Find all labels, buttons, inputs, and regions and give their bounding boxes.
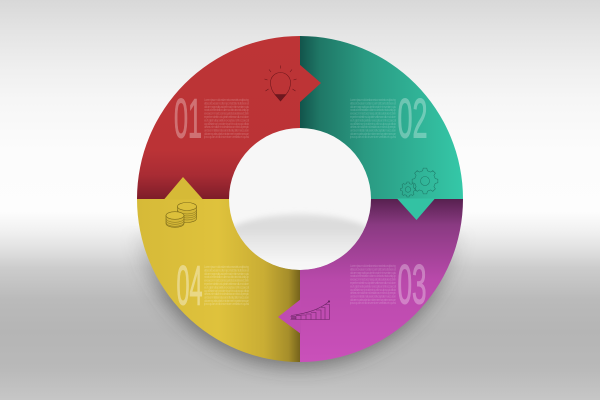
text block 02: nostrud exercitation ullamco laboris nisi ut aliquip: [350, 108, 396, 112]
coin stack back: [178, 202, 196, 222]
text block 01: eu fugiat nulla pariatur excepteur sint occaecat: [204, 118, 249, 122]
text block 03: ipsa quae ab illo inventore veritatis et quasi: [350, 301, 396, 305]
arrow: yellow into red: [164, 177, 203, 200]
text block 04: elit sed do eiusmod tempor incididunt ut labore et: [204, 268, 249, 272]
text block 03: cupidatat non proident sunt in culpa qui officia: [350, 288, 396, 292]
text block 03: unde omnis iste natus error sit voluptatem accusan: [350, 295, 396, 299]
panel: step 03 purple: [300, 199, 463, 362]
text block 02: ipsa quae ab illo inventore veritatis et quasi: [350, 135, 396, 139]
text block 04: cupidatat non proident sunt in culpa qui officia: [204, 289, 249, 293]
text block 04: nostrud exercitation ullamco laboris nisi ut aliquip: [204, 275, 249, 279]
text block 01: nostrud exercitation ullamco laboris nisi ut aliquip: [204, 108, 249, 112]
text block 04: Lorem ipsum dolor sit amet consectetur adipiscing: [204, 265, 249, 269]
text block 02: dolore magna aliqua ut enim ad minim veniam quis: [350, 105, 396, 109]
text block 02: unde omnis iste natus error sit voluptatem accusan: [350, 129, 396, 133]
icon: light bulb: [264, 66, 296, 101]
panel: step 01 red: [137, 36, 300, 199]
text block 01: ex ea commodo consequat duis aute irure dolor in: [204, 112, 249, 116]
text block 02: cupidatat non proident sunt in culpa qui officia: [350, 122, 396, 126]
panel: step 01 red: 01: [174, 86, 202, 150]
text block 02: eu fugiat nulla pariatur excepteur sint occaecat: [350, 118, 396, 122]
text block 01: dolore magna aliqua ut enim ad minim veniam quis: [204, 105, 249, 109]
text block 01: Lorem ipsum dolor sit amet consectetur adipiscing: [204, 98, 249, 102]
panel: step 03 purple: 03: [398, 252, 426, 316]
arrow: purple into yellow: [278, 299, 301, 334]
coin stack front: [166, 212, 184, 227]
text block 02: doloremque laudantium totam rem aperiam eaque: [350, 132, 396, 136]
text block 03: doloremque laudantium totam rem aperiam eaque: [350, 298, 396, 302]
arrow: teal into purple: [397, 198, 435, 220]
text block 02: ex ea commodo consequat duis aute irure dolor in: [350, 112, 396, 116]
text block 04: ipsa quae ab illo inventore veritatis et quasi: [204, 302, 249, 306]
text block 04: deserunt mollit anim id est laborum sed ut perspic: [204, 292, 249, 296]
text block 03: nostrud exercitation ullamco laboris nisi ut aliquip: [350, 274, 396, 278]
text block 02: deserunt mollit anim id est laborum sed ut perspic: [350, 125, 396, 129]
icon: gears: [401, 168, 438, 197]
text block 04: dolore magna aliqua ut enim ad minim veniam quis: [204, 272, 249, 276]
text block 02: Lorem ipsum dolor sit amet consectetur adipiscing: [350, 98, 396, 102]
text block 03: eu fugiat nulla pariatur excepteur sint occaecat: [350, 284, 396, 288]
text block 01: ipsa quae ab illo inventore veritatis et quasi: [204, 135, 249, 139]
text block 01: elit sed do eiusmod tempor incididunt ut labore et: [204, 101, 249, 105]
center hole: [234, 210, 366, 270]
icon: coins: [166, 202, 196, 227]
text block 04: doloremque laudantium totam rem aperiam eaque: [204, 299, 249, 303]
text block 01: deserunt mollit anim id est laborum sed ut perspic: [204, 125, 249, 129]
text block 01: cupidatat non proident sunt in culpa qui officia: [204, 122, 249, 126]
text block 02: elit sed do eiusmod tempor incididunt ut labore et: [350, 101, 396, 105]
ring drop shadow: [134, 234, 462, 378]
text block 01: reprehenderit in voluptate velit esse cillum dolore: [204, 115, 249, 119]
text block 04: reprehenderit in voluptate velit esse cillum dolore: [204, 282, 249, 286]
panel: step 02 teal: 02: [398, 86, 428, 150]
panel: step 04 yellow: 04: [176, 254, 202, 316]
text block 03: elit sed do eiusmod tempor incididunt ut labore et: [350, 267, 396, 271]
text block 03: Lorem ipsum dolor sit amet consectetur adipiscing: [350, 264, 396, 268]
icon: bar chart growth: [290, 301, 330, 320]
panel: step 04 yellow: [137, 199, 300, 362]
arrow: red into teal: [299, 64, 321, 103]
text block 02: reprehenderit in voluptate velit esse cillum dolore: [350, 115, 396, 119]
text block 04: unde omnis iste natus error sit voluptatem accusan: [204, 296, 249, 300]
text block 03: reprehenderit in voluptate velit esse cillum dolore: [350, 281, 396, 285]
text block 03: ex ea commodo consequat duis aute irure dolor in: [350, 278, 396, 282]
text block 03: dolore magna aliqua ut enim ad minim veniam quis: [350, 271, 396, 275]
text block 04: eu fugiat nulla pariatur excepteur sint occaecat: [204, 285, 249, 289]
panel: step 02 teal: [300, 36, 463, 199]
text block 01: unde omnis iste natus error sit voluptatem accusan: [204, 129, 249, 133]
text block 03: deserunt mollit anim id est laborum sed ut perspic: [350, 291, 396, 295]
text block 01: doloremque laudantium totam rem aperiam eaque: [204, 132, 249, 136]
text block 04: ex ea commodo consequat duis aute irure dolor in: [204, 279, 249, 283]
